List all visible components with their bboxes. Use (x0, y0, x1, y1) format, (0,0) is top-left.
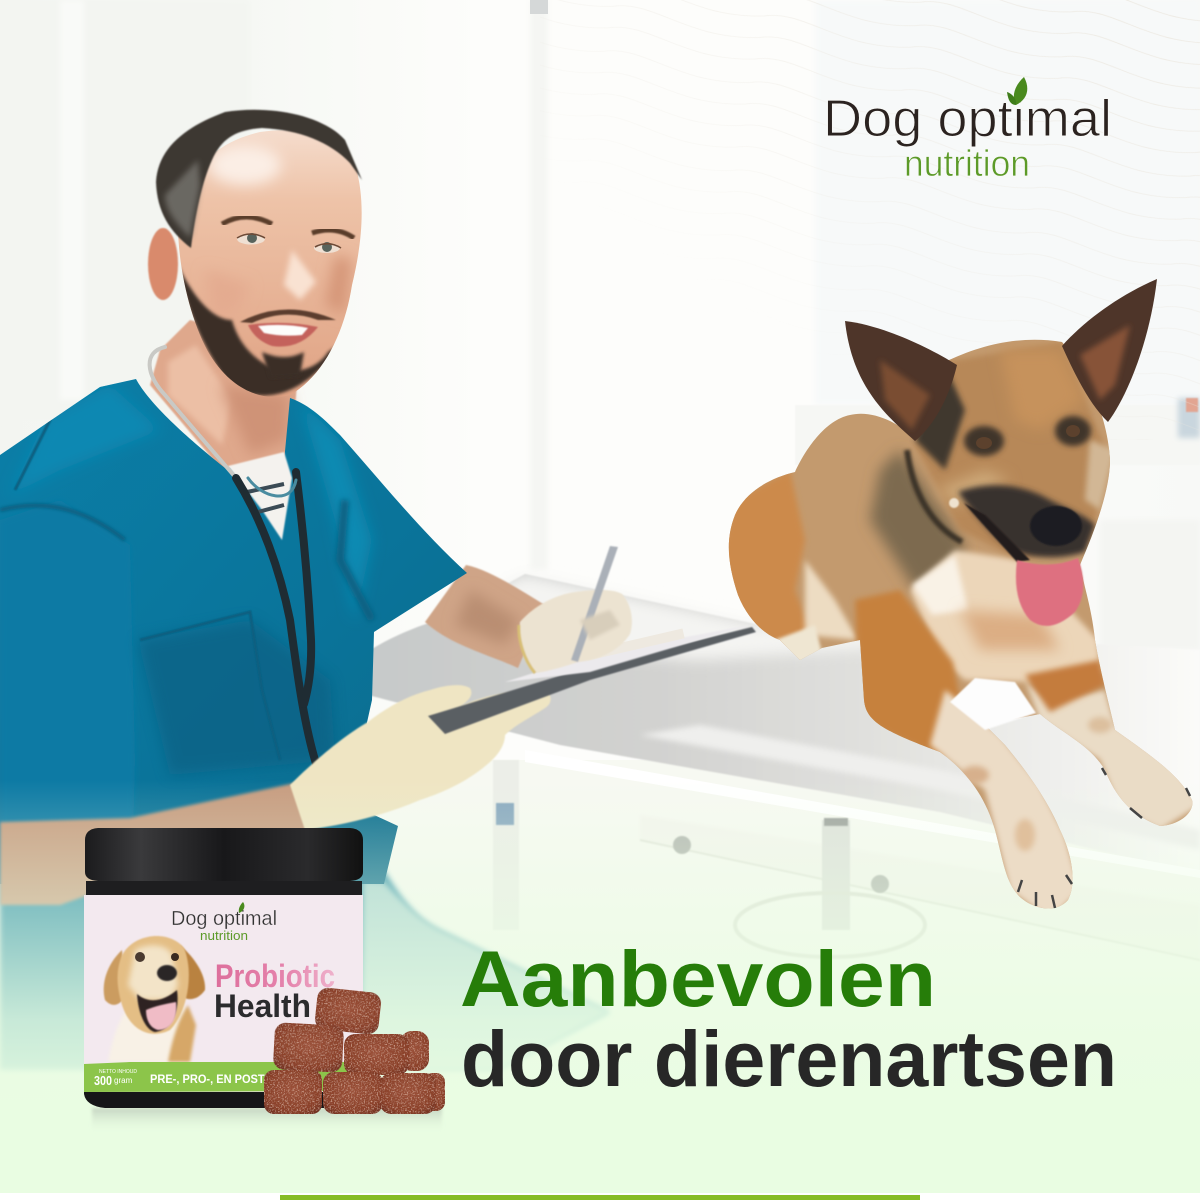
logo: Dog optimal nutrition (823, 77, 1112, 184)
stethoscope (150, 347, 318, 770)
muzzle (958, 485, 1095, 557)
dog mouth (964, 503, 1030, 562)
jar label (84, 895, 363, 1092)
logo subline: nutrition (904, 143, 1030, 184)
label green strip (84, 1062, 363, 1092)
headline line 2: door dierenartsen (461, 1014, 1117, 1103)
white bottom edge (0, 1193, 1200, 1200)
jar label: nutrition (200, 928, 248, 943)
dog nose (1030, 506, 1082, 546)
haunch (728, 472, 806, 648)
dog (720, 275, 1200, 930)
jar neck (86, 881, 362, 897)
neck shadow (870, 450, 965, 590)
label title: Probiotic (215, 958, 335, 994)
headline line 1: Aanbevolen (460, 934, 936, 1023)
label dog portrait (104, 936, 205, 1062)
jar label: Health (214, 988, 311, 1024)
left gloved hand (290, 685, 551, 830)
head shading (915, 342, 1110, 560)
veterinarian (0, 110, 756, 1070)
claws (1018, 768, 1190, 908)
beard (178, 265, 345, 396)
icon: small leaf (239, 902, 244, 913)
jar label: PRE-, PRO-, EN POSTBIOTICA (150, 1074, 310, 1086)
treat back right (424, 1073, 445, 1111)
dog body (720, 330, 1200, 930)
headline (460, 934, 1117, 1103)
treat bottom centre (323, 1072, 383, 1114)
neck (150, 320, 300, 470)
eyebrows and eyes (222, 217, 354, 253)
lower forearm (0, 783, 312, 905)
jar reflection (92, 1108, 442, 1134)
treat bottom right (380, 1073, 436, 1114)
table leg with blue label (493, 760, 519, 930)
table top (368, 574, 1200, 875)
stool pole (673, 818, 925, 957)
treat mid centre (344, 1034, 409, 1075)
logo wordmark: Dog optimal (823, 90, 1112, 148)
examination table and floor (368, 574, 1200, 1120)
front leg right (1025, 680, 1200, 830)
lower body fading out (0, 870, 610, 1070)
treat mid left (273, 1022, 344, 1073)
dog tongue (1016, 558, 1083, 626)
jar base (84, 1088, 363, 1108)
right ear (1062, 279, 1157, 422)
blue scrubs top (0, 370, 480, 890)
dog eyes (964, 416, 1091, 456)
jar label: NETTO INHOUD (99, 1069, 137, 1075)
treat mid right (400, 1031, 429, 1071)
chew treats (264, 987, 445, 1114)
green bottom bar (280, 1195, 920, 1200)
treat top (314, 987, 382, 1035)
jar lid (85, 828, 363, 881)
chest (910, 550, 1100, 682)
clipboard (428, 627, 756, 734)
treat bottom left (264, 1070, 322, 1114)
left ear (845, 321, 957, 441)
product jar (84, 828, 442, 1134)
white chin spot (949, 498, 959, 508)
hair (156, 110, 362, 248)
face (178, 130, 362, 396)
bottom fade overlay (0, 780, 1200, 1193)
dark collar line (907, 450, 962, 542)
label logo: Dog optimal (171, 908, 277, 930)
ear (148, 228, 178, 300)
jar label: gram (114, 1076, 133, 1085)
undershirt (228, 452, 292, 540)
white table patch (950, 678, 1036, 730)
front leg left (855, 590, 960, 760)
icon: leaf (1007, 77, 1027, 105)
right gloved hand with pen (519, 546, 632, 673)
far arm (425, 565, 545, 668)
photo background: clinic room (0, 0, 1200, 650)
jar label: 300 (94, 1073, 112, 1088)
